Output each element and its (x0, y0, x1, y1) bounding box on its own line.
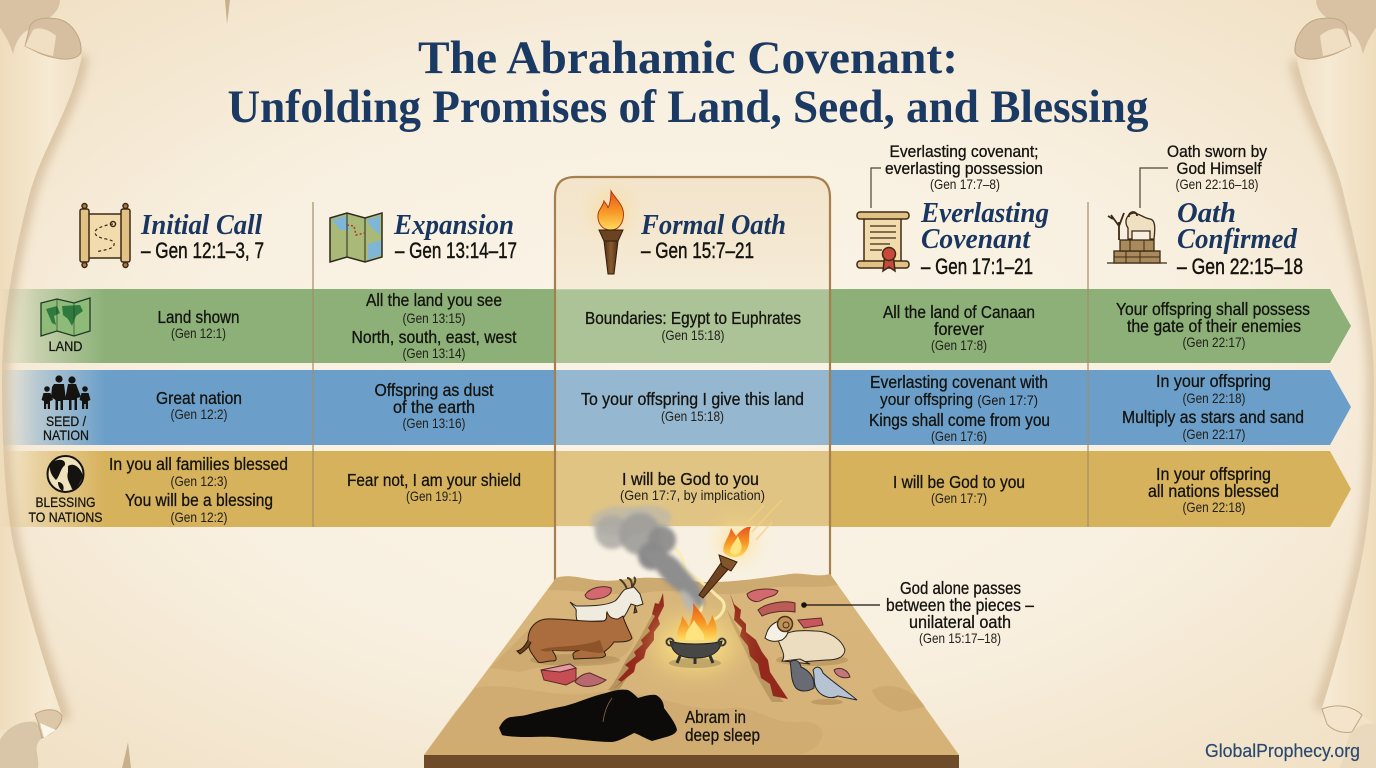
heading: Expansion: Expansion (393, 209, 514, 241)
seed cell: Oath Confirmed: In your offspring (1156, 371, 1271, 391)
column divider 1 (312, 202, 314, 527)
heading: Initial Call (140, 209, 264, 263)
blessing cell: Oath Confirmed (1148, 464, 1279, 515)
seed cell: Expansion (374, 380, 494, 431)
land cell: Oath Confirmed: Your offspring shall possess (1116, 299, 1310, 319)
icon: covenant scroll with seal (857, 212, 909, 271)
heading: Oath Confirmed: – Gen 22:15–18 (1177, 254, 1303, 279)
callout: God alone passes: unilateral oath (909, 612, 1011, 632)
seed cell: Expansion: of the earth (393, 397, 475, 417)
land cell: Expansion (352, 290, 517, 361)
blessing cell: Formal Oath (620, 469, 765, 503)
callout: oath sworn by God Himself: God Himself (1176, 160, 1262, 178)
heading: Everlasting Covenant: – Gen 17:1–21 (921, 254, 1033, 279)
seed cell: Everlasting Covenant (869, 372, 1050, 444)
land cell: Initial Call: Land shown (158, 307, 240, 327)
seed cell: Formal Oath: To your offspring I give this land (581, 389, 804, 409)
row label: seed / nation: SEED / (46, 413, 86, 429)
row label: blessing to nations (28, 456, 102, 525)
icon: regional map (330, 213, 382, 262)
blessing cell: Formal Oath: I will be God to you (622, 469, 759, 489)
land cell: Initial Call (158, 307, 240, 341)
cracks: path between the pieces (608, 593, 788, 702)
callout: everlasting covenant: Everlasting covenant; (890, 143, 1038, 161)
blessing cell: Expansion: (Gen 19:1) (406, 488, 462, 504)
icon: map scroll (80, 204, 130, 268)
seed cell: Initial Call: (Gen 12:2) (170, 406, 228, 422)
illustration: doves (790, 660, 857, 705)
heading: Everlasting Covenant (920, 197, 1049, 279)
illustration: ram (765, 616, 848, 666)
land cell: Initial Call: (Gen 12:1) (171, 325, 226, 341)
heading: Formal Oath: – Gen 15:7–21 (641, 238, 754, 263)
icon: ram on altar (1107, 212, 1167, 263)
callout: everlasting covenant: everlasting possession (885, 160, 1043, 178)
column divider 2 (1087, 202, 1089, 527)
blessing cell: Expansion (347, 470, 521, 504)
label: Abram in deep sleep: Abram in (685, 707, 746, 727)
seed cell: Oath Confirmed (1122, 371, 1304, 442)
heading: Initial Call: Initial Call (140, 209, 263, 241)
seed cell: Oath Confirmed: (Gen 22:18) (1182, 390, 1246, 406)
illustration: small meat piece (834, 668, 850, 678)
seed cell: Everlasting Covenant: your offspring (Gen 17:7) (880, 390, 1038, 409)
heading: Oath Confirmed: Oath (1177, 197, 1236, 229)
heading: Initial Call: – Gen 12:1–3, 7 (141, 238, 264, 263)
row label: blessing to nations: TO NATIONS (28, 509, 102, 525)
band: land row (0, 289, 1351, 363)
seed cell: Formal Oath (581, 389, 804, 424)
icon: globe (48, 456, 84, 492)
land cell: Everlasting Covenant: (Gen 17:8) (931, 337, 987, 353)
seed cell: Expansion: Offspring as dust (374, 380, 494, 400)
blessing cell: Expansion: Fear not, I am your shield (347, 470, 521, 490)
blessing cell: Initial Call: You will be a blessing (125, 490, 273, 510)
land cell: Formal Oath: Boundaries: Egypt to Euphrates (585, 308, 801, 328)
blessing cell: Everlasting Covenant: I will be God to you (893, 472, 1025, 492)
label: Abram in deep sleep: deep sleep (685, 725, 760, 745)
illustration: bull (517, 612, 632, 666)
illustration: meat pieces right (747, 589, 823, 628)
heading: Everlasting Covenant: Covenant (921, 223, 1031, 255)
blessing cell: Oath Confirmed: all nations blessed (1148, 481, 1279, 501)
land cell: Oath Confirmed: the gate of their enemies (1127, 316, 1301, 336)
callout: God alone passes (801, 578, 1034, 646)
seed cell: Everlasting Covenant: Kings shall come from you (869, 410, 1050, 430)
land cell: Expansion: All the land you see (366, 290, 502, 310)
land cell: Formal Oath: (Gen 15:18) (662, 327, 724, 343)
heading: Everlasting Covenant: Everlasting (920, 197, 1049, 229)
seed cell: Initial Call: Great nation (156, 388, 242, 408)
land cell: Formal Oath (585, 308, 801, 343)
title (228, 32, 1149, 133)
heading: Formal Oath (640, 209, 786, 263)
land cell: Everlasting Covenant: forever (934, 319, 984, 339)
blessing cell: Initial Call: In you all families blessed (109, 454, 288, 474)
seed cell: Expansion: (Gen 13:16) (402, 415, 466, 431)
seed cell: Oath Confirmed: (Gen 22:17) (1182, 426, 1246, 442)
land cell: Oath Confirmed: (Gen 22:17) (1182, 334, 1246, 350)
band: seed / nation row (0, 370, 1351, 445)
icon: flaming torch (591, 191, 631, 274)
blessing cell: Everlasting Covenant: (Gen 17:7) (931, 490, 987, 506)
title: Unfolding Promises of Land, Seed, and Blessing (228, 81, 1149, 133)
heading: Oath Confirmed (1177, 197, 1303, 279)
heading: Expansion (393, 209, 517, 263)
ground: covenant scene terrain (424, 574, 959, 768)
blessing cell: Oath Confirmed: (Gen 22:18) (1182, 499, 1246, 515)
land cell: Everlasting Covenant: All the land of Canaan (883, 302, 1035, 322)
title: The Abrahamic Covenant: (418, 32, 958, 84)
blessing cell: Everlasting Covenant (893, 472, 1025, 506)
callout: God alone passes: between the pieces – (886, 595, 1034, 615)
blessing cell: Formal Oath: (Gen 17:7, by implication) (620, 487, 765, 503)
land cell: Expansion: North, south, east, west (352, 327, 517, 347)
blessing cell: Initial Call: (Gen 12:3) (170, 473, 228, 489)
illustration: Abram sleeping silhouette (499, 690, 677, 742)
row label: land: LAND (48, 338, 82, 354)
seed cell: Everlasting Covenant: Everlasting covenant with (870, 372, 1048, 392)
heading: Expansion: – Gen 13:14–17 (395, 238, 517, 263)
blessing cell: Initial Call (109, 454, 288, 525)
seed cell: Formal Oath: (Gen 15:18) (661, 408, 724, 424)
seed cell: Initial Call (156, 388, 242, 422)
smoke plume (590, 505, 724, 620)
row label: land (41, 298, 90, 354)
illustration: flaming torch passing (699, 500, 782, 598)
seed cell: Oath Confirmed: Multiply as stars and sand (1122, 407, 1304, 427)
callout: God alone passes: God alone passes (900, 578, 1021, 598)
callout: everlasting covenant: (Gen 17:7–8) (930, 176, 1000, 192)
land cell: Expansion: (Gen 13:15) (402, 310, 466, 326)
land cell: Oath Confirmed (1116, 299, 1310, 350)
row label: blessing to nations: BLESSING (36, 494, 96, 510)
heading: Oath Confirmed: Confirmed (1177, 223, 1297, 255)
land cell: Everlasting Covenant (883, 302, 1035, 353)
callout: oath sworn by God Himself: Oath sworn by (1167, 143, 1268, 161)
heading: Formal Oath: Formal Oath (640, 209, 786, 241)
illustration: fire pot (655, 603, 735, 669)
callout: everlasting covenant (871, 143, 1043, 208)
callout: God alone passes: (Gen 15:17–18) (919, 630, 1001, 646)
blessing cell: Oath Confirmed: In your offspring (1156, 464, 1271, 484)
row label: seed / nation (42, 375, 90, 443)
blessing cell: Initial Call: (Gen 12:2) (170, 509, 228, 525)
label: Abram in deep sleep (685, 707, 760, 745)
panel: formal oath highlight column (555, 177, 830, 600)
row label: seed / nation: NATION (43, 427, 89, 443)
illustration: goat (570, 577, 643, 622)
callout: oath sworn by God Himself (1140, 143, 1268, 208)
source credit: GlobalProphecy.org (1205, 741, 1360, 761)
callout: oath sworn by God Himself: (Gen 22:16–18) (1176, 176, 1258, 192)
icon: family (42, 375, 90, 410)
seed cell: Everlasting Covenant: (Gen 17:6) (931, 428, 987, 444)
band: blessing to nations row (0, 451, 1351, 527)
illustration: meat pieces left (541, 587, 611, 686)
icon: green world map (41, 298, 90, 336)
land cell: Expansion: (Gen 13:14) (402, 345, 466, 361)
